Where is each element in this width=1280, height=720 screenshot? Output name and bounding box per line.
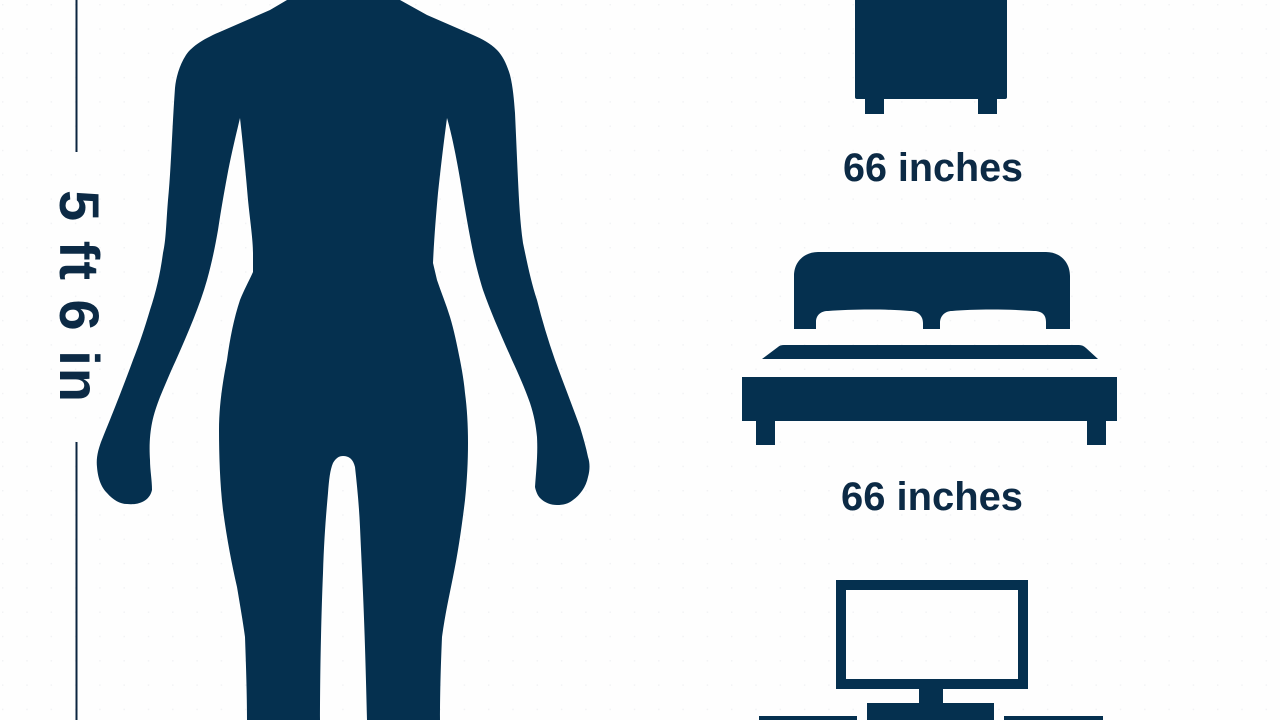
icon: bed — [742, 252, 1117, 445]
label: bed height: 66 inches — [841, 475, 1023, 519]
height measurement line — [76, 0, 78, 720]
height label: 5 ft 6 in: 5 ft 6 in — [48, 190, 111, 402]
bed headboard — [794, 252, 1070, 329]
label: cabinet height: 66 inches — [843, 146, 1023, 190]
human silhouette — [97, 0, 590, 720]
icon: cabinet — [855, 0, 1007, 114]
icon: television on stand — [759, 580, 1103, 720]
